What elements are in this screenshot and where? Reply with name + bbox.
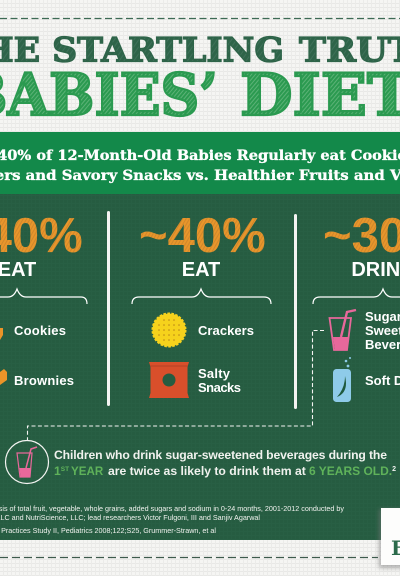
main chalkboard panel — [0, 194, 400, 540]
callout text: 6 YEARS OLD. — [309, 464, 392, 478]
stat: 40 percent: ~40% — [139, 209, 266, 263]
icon: snack bag — [149, 362, 189, 398]
title: DIET — [240, 61, 400, 129]
callout text: 1 — [54, 464, 61, 478]
icon: glass in circle — [6, 440, 48, 484]
callout text: are twice as likely to drink them at — [108, 464, 306, 478]
label: crackers: Crackers — [198, 323, 254, 338]
icon: brownie — [0, 369, 7, 385]
label: eat: EAT — [182, 259, 220, 281]
icon: cookie — [0, 328, 3, 340]
callout — [6, 440, 396, 484]
bracket — [313, 289, 400, 304]
title — [0, 30, 400, 129]
dashed connector — [28, 330, 324, 440]
callout text — [54, 448, 396, 478]
label: sugar-sweetened beverages — [365, 309, 400, 352]
icon: sugary drink glass — [330, 310, 356, 350]
icon: cracker — [152, 314, 186, 346]
column: eat cookies and brownies — [0, 209, 87, 388]
label: cookies: Cookies — [14, 323, 66, 338]
label: salty snacks — [198, 366, 241, 395]
top dashed stitch line — [0, 18, 400, 20]
bracket — [0, 289, 87, 304]
label: brownies: Brownies — [14, 373, 74, 388]
bottom dashed stitch line — [0, 556, 378, 558]
callout text: ST — [61, 466, 69, 473]
divider — [294, 214, 297, 409]
callout text: YEAR — [71, 465, 104, 478]
callout text: 2 — [392, 466, 396, 473]
divider — [107, 211, 110, 406]
logo card — [379, 508, 400, 568]
label: salty snacks: Snacks — [198, 380, 241, 395]
column: eat crackers and salty snacks — [132, 209, 271, 398]
callout text: Children who drink sugar-sweetened beverages during the — [54, 448, 387, 462]
column: drink sugary beverages — [313, 209, 400, 402]
label: salty snacks: Salty — [198, 366, 231, 381]
icon: soda can — [333, 357, 351, 402]
subtitle band — [0, 132, 400, 194]
bracket — [132, 289, 271, 304]
footnotes — [0, 504, 344, 535]
